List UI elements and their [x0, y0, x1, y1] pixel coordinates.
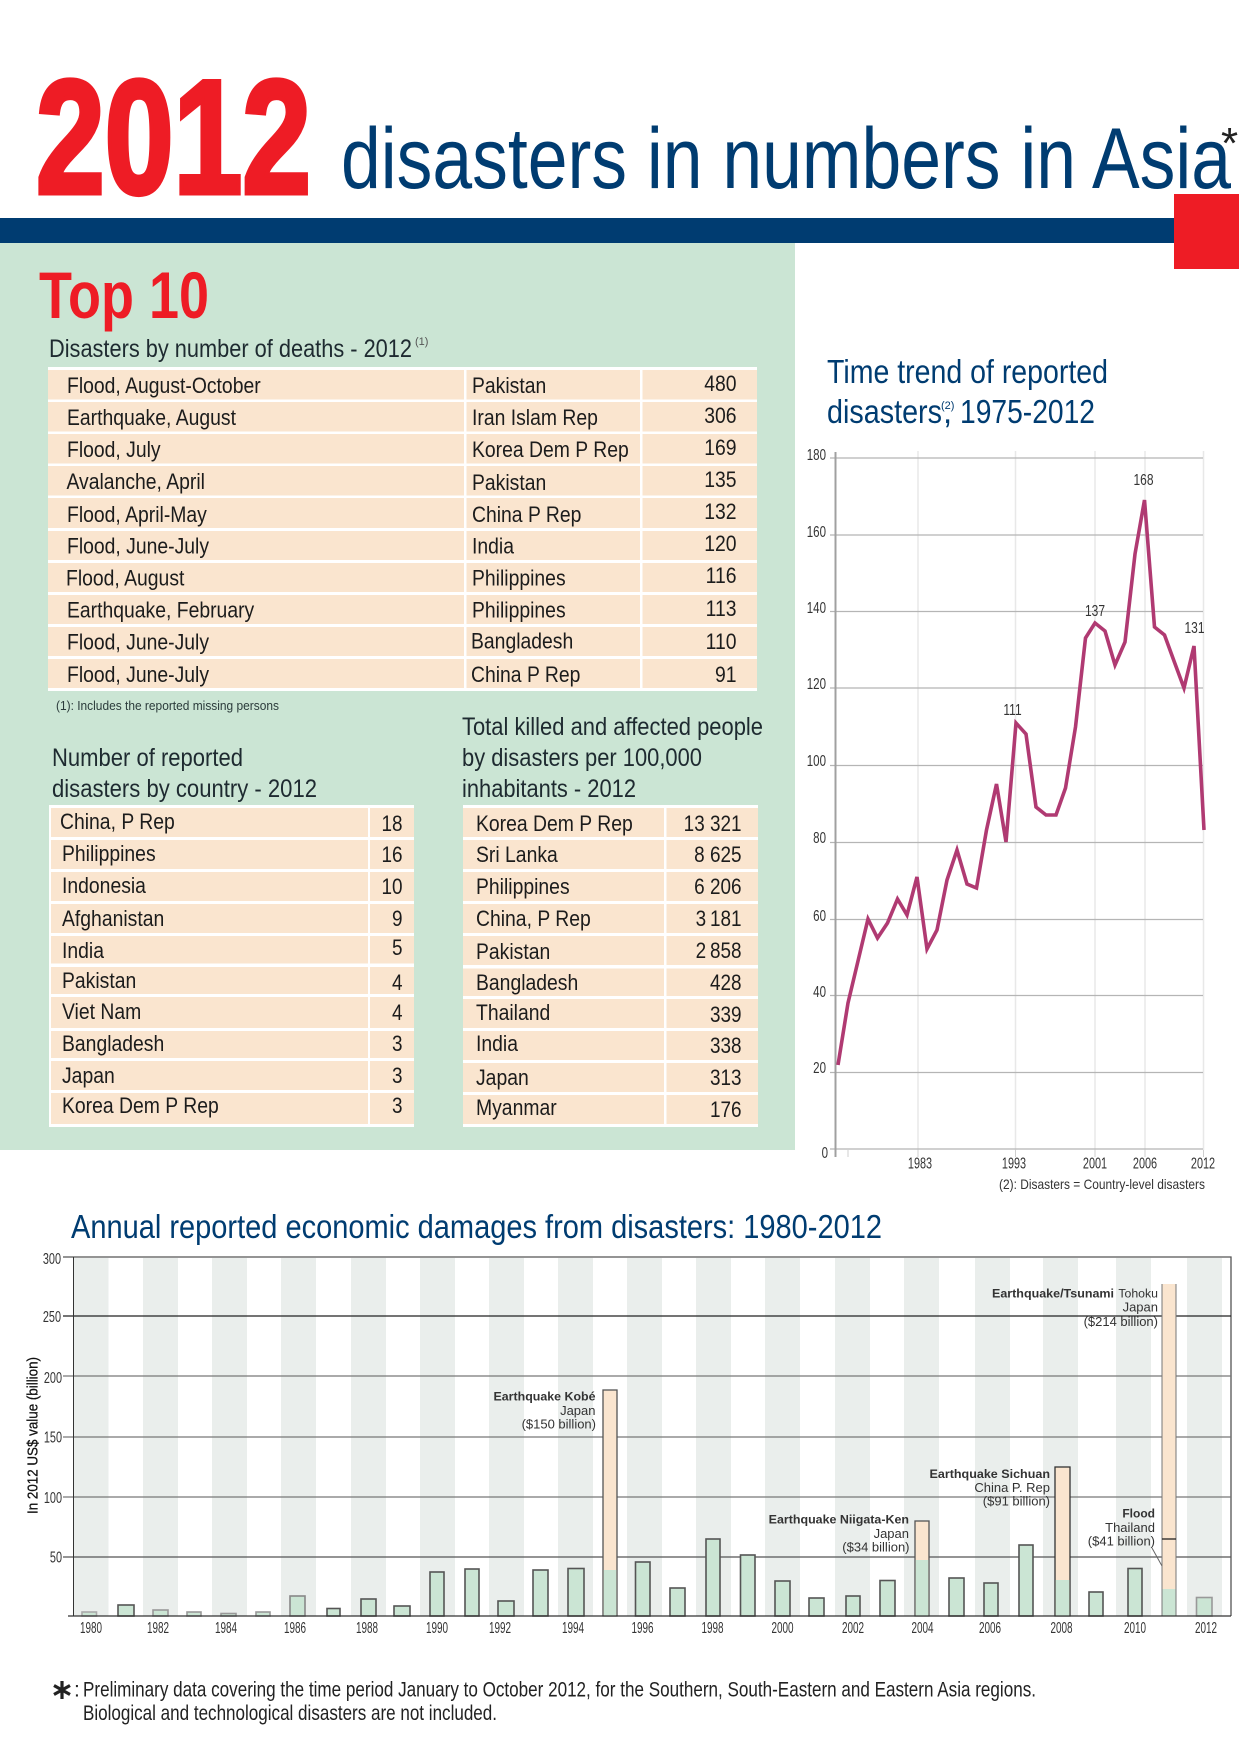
table: disasters by number of deaths: Avalanche, April — [66, 470, 205, 494]
line chart: reported disasters: 2012 — [1191, 1154, 1215, 1172]
heading: time trend: Time trend of reported — [827, 353, 1108, 390]
table: disasters by number of deaths: Pakistan — [472, 471, 546, 495]
panel: green top 10 background — [0, 243, 795, 1150]
table: disasters by number of deaths: Philippines — [472, 566, 566, 591]
bar chart: economic damages — [26, 1250, 1231, 1637]
callout: Niigata-Ken: Japan — [874, 1526, 909, 1541]
table: disasters by number of deaths: Earthquake, August — [67, 406, 236, 430]
line chart: reported disasters: 2006 — [1133, 1154, 1157, 1172]
heading: total killed and affected: by disasters per 100,000 — [462, 744, 702, 772]
footnote: Preliminary data covering the time period January to October 2012, for the Southern, South-Eastern and Eastern Asia regions. — [83, 1678, 1036, 1702]
callout: Tohoku — [992, 1286, 1158, 1329]
footnote: Biological and technological disasters are not included. — [83, 1702, 497, 1725]
table: disasters by number of deaths: China P Rep — [471, 663, 580, 687]
table: disasters by number of deaths: Earthquake, February — [67, 598, 255, 623]
table: killed and affected per 100,000 — [463, 805, 758, 1127]
table: disasters by number of deaths: Flood, July — [67, 438, 161, 462]
table: disasters by number of deaths: 169 — [704, 436, 736, 460]
bar chart: economic damages: 1992 — [489, 1619, 511, 1637]
heading: disasters by number of deaths: (1) — [415, 336, 428, 348]
callout: Flood Thailand: Flood — [1122, 1507, 1155, 1521]
bar chart: economic damages: 2010 — [1124, 1619, 1146, 1637]
callout: Sichuan: Earthquake Sichuan — [930, 1467, 1050, 1481]
table: disasters by number of deaths: Flood, April-May — [67, 503, 207, 527]
bar chart: economic damages: 2012 — [1195, 1619, 1217, 1637]
table: killed and affected per 100,000: Myanmar — [476, 1096, 557, 1120]
table: reported disasters by country: Korea Dem P Rep — [62, 1094, 219, 1118]
table: reported disasters by country: 10 — [381, 875, 402, 899]
bar chart: economic damages: 300 — [43, 1250, 61, 1268]
icon: asterisk — [54, 1681, 70, 1699]
bar chart: economic damages: 1994 — [562, 1619, 584, 1637]
table: disasters by number of deaths: Flood, June-July — [67, 534, 210, 559]
table: killed and affected per 100,000: 2 858 — [696, 939, 742, 963]
bar chart: economic damages: 2000 — [771, 1619, 794, 1637]
table: reported disasters by country: 16 — [381, 843, 402, 867]
table: killed and affected per 100,000: 6 206 — [694, 875, 742, 899]
table: disasters by number of deaths: Philippines — [472, 598, 566, 623]
callout: Niigata-Ken — [769, 1513, 910, 1555]
table: disasters by number of deaths: 480 — [704, 372, 736, 396]
bar chart: economic damages: 1982 — [147, 1619, 169, 1637]
heading: time trend — [827, 353, 1108, 430]
heading: reported disasters by country: disasters by country - 2012 — [52, 775, 317, 803]
table: killed and affected per 100,000: Sri Lanka — [476, 843, 558, 867]
table: killed and affected per 100,000: 176 — [710, 1098, 742, 1122]
line chart: reported disasters: 131 — [1184, 618, 1205, 636]
callout: Flood Thailand: Thailand — [1105, 1520, 1155, 1535]
table: killed and affected per 100,000: Philippines — [476, 875, 570, 899]
bar chart: economic damages: 1990 — [426, 1619, 448, 1637]
heading: economic damages: Annual reported economic damages from disasters: 1980-2012 — [71, 1208, 882, 1245]
table: disasters by number of deaths: Flood, August — [66, 566, 185, 591]
callout: Flood Thailand — [1088, 1507, 1155, 1549]
bar chart: economic damages: 150 — [44, 1428, 62, 1446]
heading: time trend: disasters — [827, 393, 942, 430]
line chart: reported disasters: 1993 — [1002, 1154, 1026, 1172]
table: killed and affected per 100,000: China, P Rep — [476, 907, 591, 931]
title — [36, 47, 1238, 228]
table: disasters by number of deaths: Flood, August-October — [67, 374, 261, 398]
table: reported disasters by country: Afghanistan — [62, 907, 164, 931]
table: reported disasters by country: China, P Rep — [60, 810, 175, 834]
callout: Flood Thailand: ($41 billion) — [1088, 1534, 1155, 1549]
bar chart: economic damages: 1980 — [80, 1619, 102, 1637]
bar chart: economic damages: 1986 — [284, 1619, 306, 1637]
callout: Tohoku: Japan — [1123, 1300, 1158, 1315]
line chart: reported disasters: 60 — [813, 906, 826, 924]
callout: Sichuan — [930, 1467, 1050, 1509]
heading: time trend: , — [943, 393, 952, 430]
header band — [0, 218, 1174, 243]
line chart: reported disasters: 180 — [807, 445, 826, 463]
table: killed and affected per 100,000: Thailand — [476, 1001, 550, 1025]
heading: disasters by number of deaths: Disasters by number of deaths - 2012 — [49, 335, 412, 363]
table: reported disasters by country: Philippines — [62, 842, 156, 866]
table: reported disasters by country: 5 — [392, 936, 402, 960]
line chart: reported disasters: 140 — [807, 598, 826, 616]
table: killed and affected per 100,000: 339 — [710, 1003, 742, 1027]
table: disasters by number of deaths: 91 — [715, 663, 736, 687]
heading: time trend: (2) — [941, 400, 954, 412]
table: reported disasters by country: 3 — [392, 1032, 402, 1056]
heading: reported disasters by country — [52, 744, 317, 803]
table: reported disasters by country: 3 — [392, 1094, 402, 1118]
table: killed and affected per 100,000: India — [476, 1032, 518, 1056]
line chart: reported disasters: 80 — [813, 828, 826, 846]
table: disasters by number of deaths: 135 — [704, 468, 736, 492]
bar chart: economic damages: 1988 — [356, 1619, 378, 1637]
callout: Kobé: ($150 billion) — [522, 1417, 596, 1432]
line chart: reported disasters: 168 — [1133, 470, 1154, 488]
heading: total killed and affected: Total killed and affected people — [462, 713, 763, 741]
table: killed and affected per 100,000: 428 — [710, 971, 742, 995]
line chart: reported disasters: 0 — [822, 1143, 828, 1161]
bar chart: economic damages: 2004 — [911, 1619, 934, 1637]
callout: Niigata-Ken: Earthquake Niigata-Ken — [769, 1513, 909, 1527]
table: disasters by number of deaths: 116 — [706, 564, 736, 588]
table: killed and affected per 100,000: 338 — [710, 1034, 742, 1058]
title: * — [1221, 119, 1238, 168]
table: disasters by number of deaths: 306 — [704, 404, 736, 428]
callout: Kobé — [494, 1390, 596, 1432]
table: disasters by number of deaths: India — [472, 534, 514, 559]
table: killed and affected per 100,000: Bangladesh — [476, 971, 578, 995]
table: disasters by number of deaths: Korea Dem P Rep — [472, 438, 629, 462]
table: reported disasters by country: 18 — [381, 812, 402, 836]
heading: total killed and affected — [462, 713, 763, 803]
table: disasters by number of deaths: Iran Islam Rep — [472, 406, 598, 430]
table: disasters by number of deaths: 110 — [706, 630, 736, 654]
table: disasters by number of deaths: 132 — [704, 500, 736, 524]
table: reported disasters by country: India — [62, 939, 104, 963]
heading: reported disasters by country: Number of reported — [52, 744, 243, 772]
table: disasters by number of deaths — [48, 367, 757, 691]
callout: Tohoku: Tohoku — [1118, 1286, 1158, 1300]
table: reported disasters by country: 4 — [392, 971, 402, 995]
callout: Tohoku: ($214 billion) — [1084, 1314, 1158, 1329]
callout: Sichuan: ($91 billion) — [983, 1494, 1050, 1509]
line chart: reported disasters: 40 — [813, 982, 826, 1000]
table: killed and affected per 100,000: 13 321 — [684, 812, 742, 836]
callout: Niigata-Ken: ($34 billion) — [842, 1540, 910, 1555]
table: reported disasters by country: 4 — [392, 1001, 402, 1025]
table: killed and affected per 100,000: 313 — [710, 1066, 742, 1090]
bar chart: economic damages: 1996 — [631, 1619, 654, 1637]
bar chart: economic damages: 2002 — [842, 1619, 864, 1637]
bar: 1995 Kobé — [603, 1390, 617, 1616]
bar: 2008 Sichuan — [1055, 1467, 1070, 1616]
table: reported disasters by country: Pakistan — [62, 969, 136, 993]
callout: Sichuan: China P. Rep — [974, 1480, 1050, 1495]
heading: Top 10: Top 10 — [39, 258, 209, 332]
bar chart: economic damages: 1984 — [215, 1619, 237, 1637]
line chart: reported disasters: 20 — [813, 1058, 826, 1076]
footnote — [54, 1678, 1036, 1725]
callout: Kobé: Earthquake Kobé — [494, 1390, 596, 1404]
heading: total killed and affected: inhabitants - 2012 — [462, 775, 636, 803]
note: missing persons: (1): Includes the reported missing persons — [56, 698, 279, 713]
table: reported disasters by country: 9 — [392, 907, 402, 931]
table: killed and affected per 100,000: 8 625 — [694, 843, 742, 867]
bar chart: economic damages: 250 — [43, 1308, 61, 1326]
table: killed and affected per 100,000: Japan — [476, 1066, 529, 1090]
callout: Kobé: Japan — [560, 1403, 596, 1418]
table: killed and affected per 100,000: Korea Dem P Rep — [476, 812, 633, 836]
table: killed and affected per 100,000: 3 181 — [696, 907, 742, 931]
line chart: reported disasters: 137 — [1085, 601, 1105, 619]
bar chart: economic damages: In 2012 US$ value (billion) — [26, 1357, 42, 1514]
footnote: : — [74, 1678, 80, 1702]
line chart: reported disasters — [807, 445, 1215, 1172]
table: disasters by number of deaths: Flood, June-July — [67, 630, 210, 655]
bar chart: economic damages: 1998 — [701, 1619, 724, 1637]
red square accent — [1174, 194, 1239, 269]
bar chart: economic damages: 50 — [50, 1548, 62, 1566]
title: 2012 — [36, 47, 311, 228]
bar chart: economic damages: 2006 — [979, 1619, 1001, 1637]
bar: 2004 Niigata-Ken — [915, 1521, 929, 1616]
line chart: reported disasters: 120 — [807, 674, 826, 692]
table: disasters by number of deaths: Flood, June-July — [67, 663, 210, 687]
table: killed and affected per 100,000: Pakistan — [476, 940, 550, 964]
bar chart: economic damages: 2008 — [1050, 1619, 1073, 1637]
bar chart: economic damages: 100 — [44, 1489, 62, 1507]
callout: Tohoku: Earthquake/Tsunami — [992, 1286, 1114, 1300]
heading: time trend: 1975-2012 — [960, 393, 1095, 430]
table: reported disasters by country — [49, 805, 414, 1127]
table: disasters by number of deaths: China P Rep — [472, 503, 581, 527]
table: disasters by number of deaths: Bangladesh — [471, 629, 573, 654]
table: reported disasters by country: Japan — [62, 1064, 115, 1088]
table: disasters by number of deaths: 120 — [704, 532, 736, 556]
note: definition of disasters: (2): Disasters = Country-level disasters — [999, 1176, 1205, 1192]
bar chart: economic damages: 200 — [44, 1369, 62, 1387]
table: reported disasters by country: 3 — [392, 1064, 402, 1088]
table: reported disasters by country: Bangladesh — [62, 1032, 164, 1056]
line chart: reported disasters: 111 — [1003, 700, 1022, 718]
line chart: reported disasters: 2001 — [1083, 1154, 1107, 1172]
table: disasters by number of deaths: Pakistan — [472, 374, 546, 398]
line chart: reported disasters: 160 — [807, 522, 826, 540]
line chart: reported disasters: 1983 — [908, 1154, 932, 1172]
table: reported disasters by country: Indonesia — [62, 874, 146, 898]
table: reported disasters by country: Viet Nam — [62, 1000, 141, 1024]
line chart: reported disasters: 100 — [807, 751, 826, 769]
table: disasters by number of deaths: 113 — [706, 597, 736, 621]
bar: 2011 Tohoku and Thailand flood — [1152, 1284, 1176, 1616]
